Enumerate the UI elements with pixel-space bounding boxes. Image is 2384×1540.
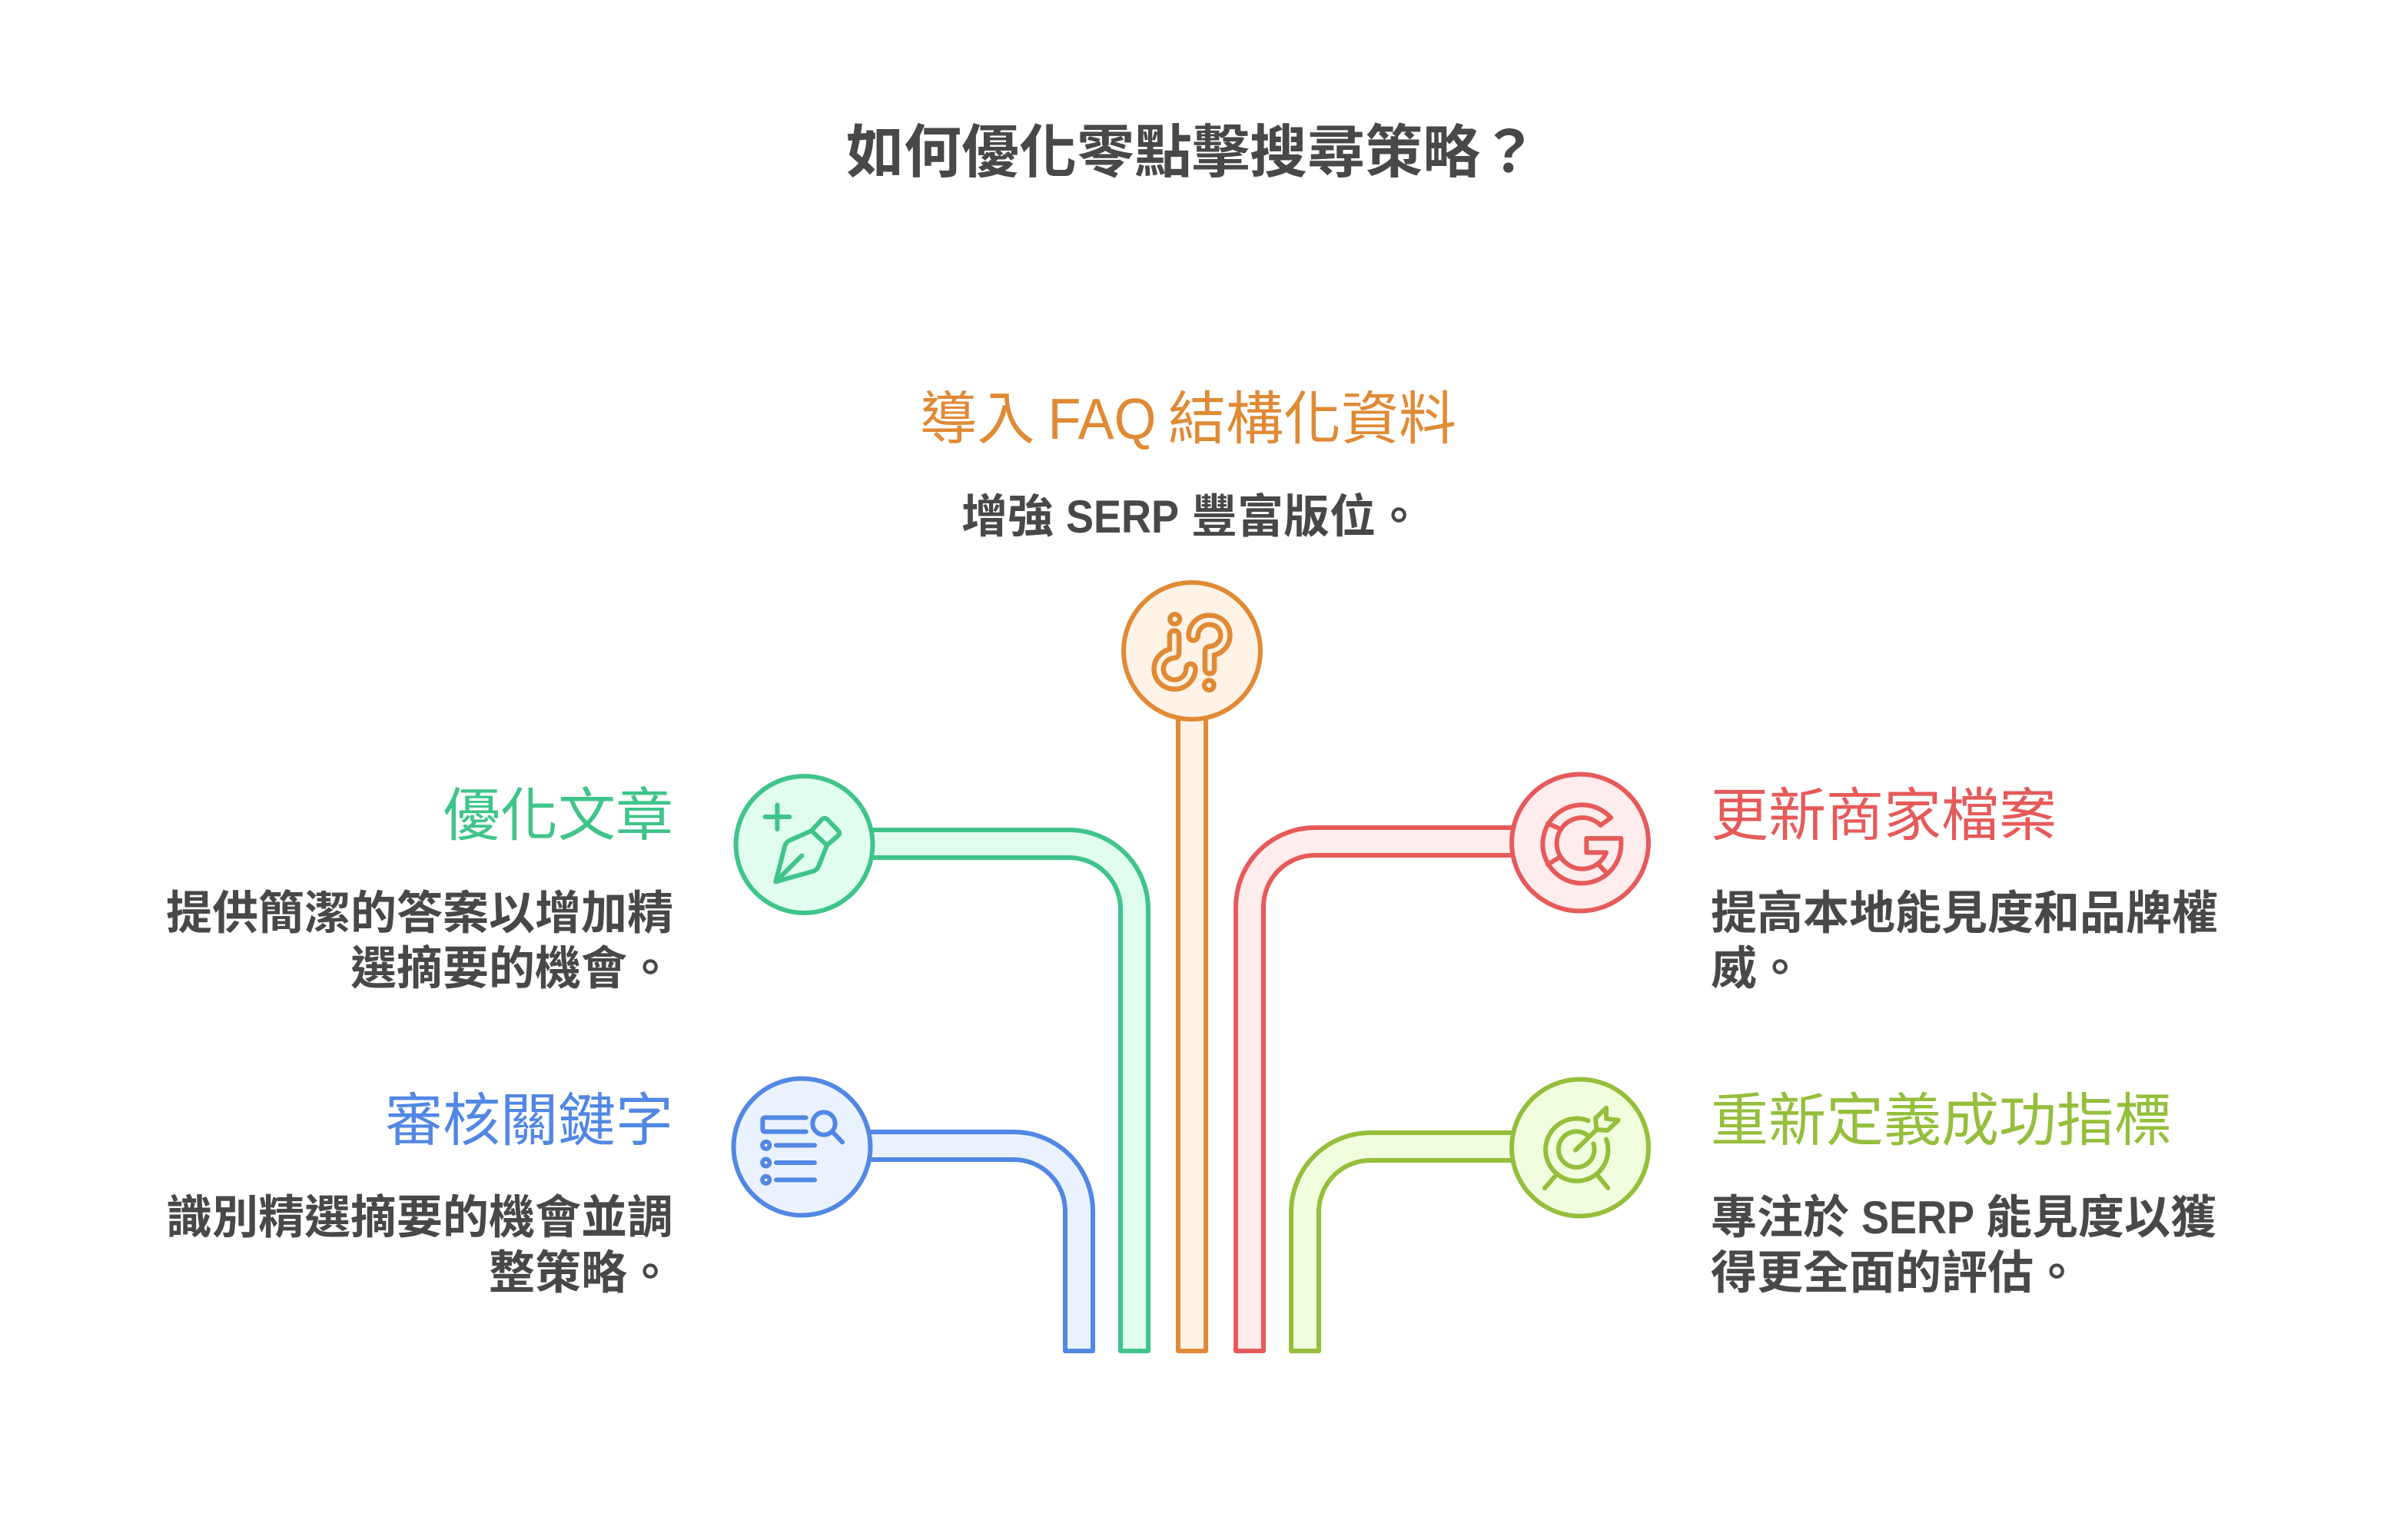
icon node: pen tool — [736, 776, 873, 913]
heading: FAQ structured data: 導入 — [919, 387, 1035, 451]
panel: optimize articles text — [166, 783, 673, 994]
heading: FAQ structured data: FAQ — [1048, 387, 1156, 451]
icon: pen nib with plus — [765, 805, 839, 881]
icon: question marks — [1159, 614, 1225, 690]
heading: update business profile: 更新商家檔案 — [1711, 783, 2057, 848]
text block: FAQ description: 增強 — [961, 491, 1054, 543]
text block: update business profile description: 威。 — [1711, 943, 1803, 994]
panel: audit keywords text — [166, 1088, 673, 1299]
icon node: Google logo — [1512, 775, 1649, 911]
text block: redefine success metrics description: SERP — [1861, 1192, 1974, 1243]
text block: redefine success metrics description: 專注於 — [1711, 1192, 1849, 1243]
heading: redefine success metrics: 重新定義成功指標 — [1711, 1088, 2172, 1153]
panel: redefine success metrics text — [1711, 1088, 2216, 1299]
panel: update business profile text — [1711, 783, 2218, 994]
icon node: keyword list search — [733, 1079, 870, 1216]
connector: lime tube — [1291, 1133, 1537, 1351]
connector: orange tube — [1178, 707, 1206, 1351]
title: 如何優化零點擊搜尋策略？ — [846, 120, 1538, 184]
connector: blue tube — [845, 1132, 1093, 1351]
text block: audit keywords description: 識別精選摘要的機會並調 — [166, 1192, 673, 1243]
icon node: target — [1512, 1079, 1649, 1216]
text block: optimize articles description: 提供簡潔的答案以增加精 — [166, 888, 673, 939]
panel: FAQ structured data text — [919, 387, 1456, 543]
text block: redefine success metrics description: 得更全面的評估。 — [1711, 1247, 2080, 1299]
icon: target with arrow — [1545, 1108, 1619, 1188]
text block: FAQ description: 豐富版位。 — [1191, 491, 1422, 543]
icon node: question marks — [1124, 582, 1260, 719]
text block: redefine success metrics description: 能見度以獲 — [1986, 1192, 2216, 1243]
text block: update business profile description: 提高本地能見度和品牌權 — [1711, 888, 2218, 939]
connector: green tube — [845, 830, 1148, 1351]
heading: audit keywords: 審核關鍵字 — [385, 1088, 673, 1153]
heading: FAQ structured data: 結構化資料 — [1168, 387, 1456, 451]
icon: Google G — [1542, 805, 1621, 883]
text block: audit keywords description: 整策略。 — [489, 1247, 673, 1299]
connector: red tube — [1236, 828, 1537, 1351]
heading: optimize articles: 優化文章 — [443, 783, 673, 848]
text block: FAQ description: SERP — [1066, 491, 1179, 543]
icon: list with magnifier — [762, 1112, 842, 1183]
text block: optimize articles description: 選摘要的機會。 — [350, 943, 673, 994]
